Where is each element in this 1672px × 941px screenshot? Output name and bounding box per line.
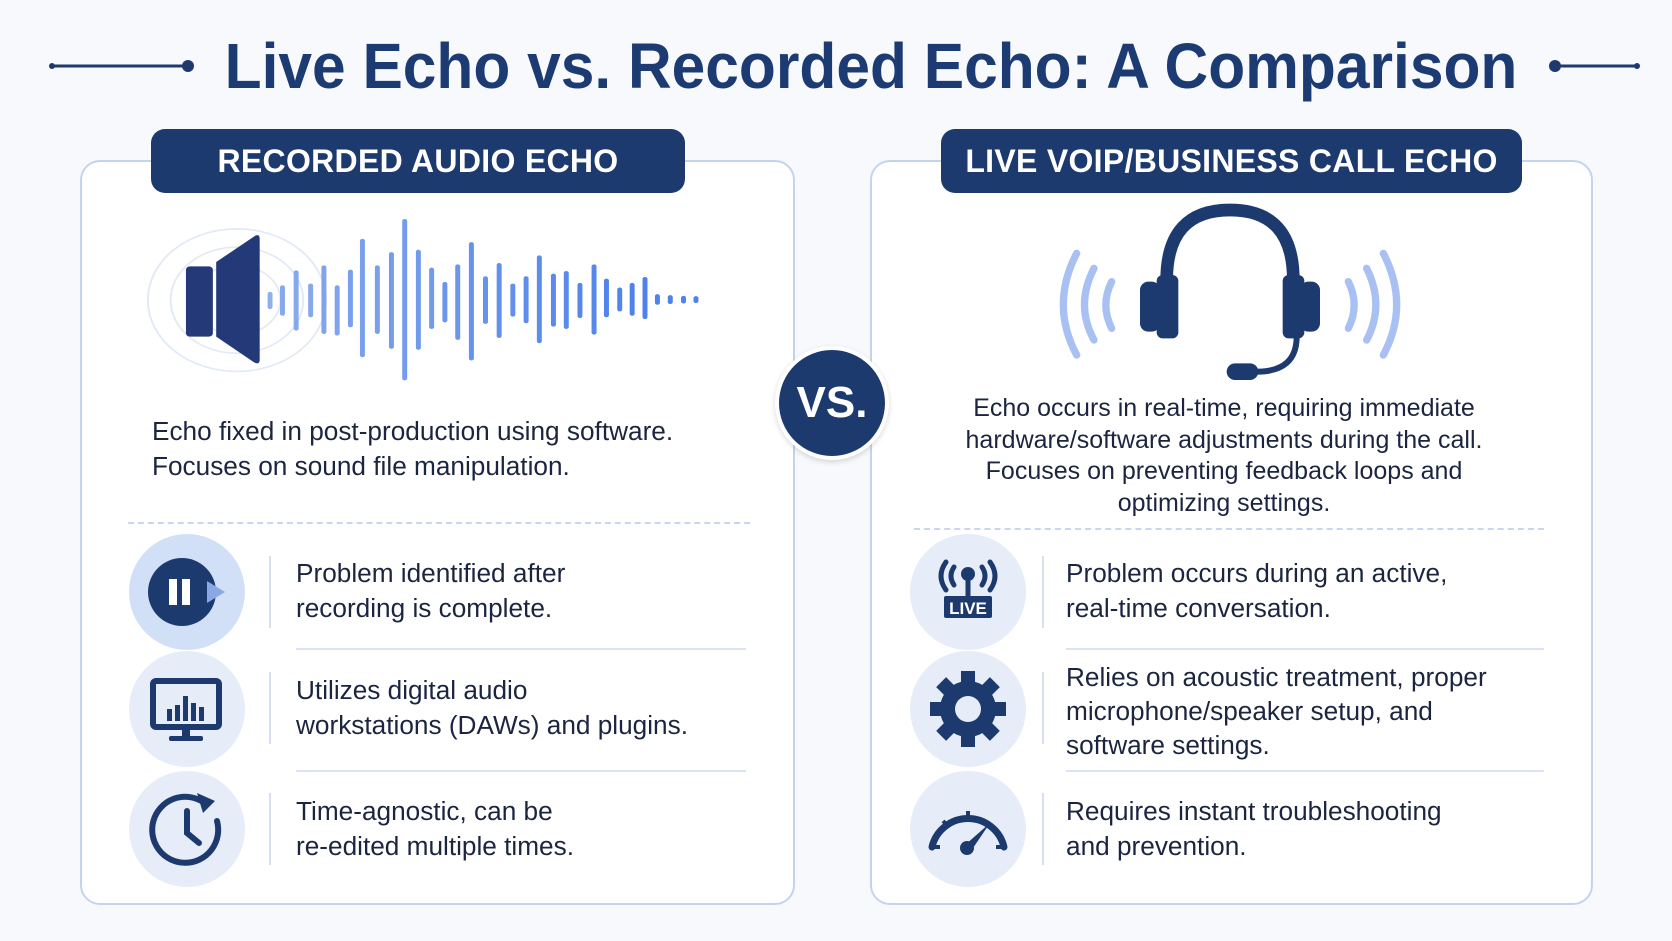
icon: vs circle: VS.	[797, 378, 867, 427]
icon: live antenna	[910, 534, 1026, 650]
title line left	[49, 60, 194, 72]
icon: monitor	[129, 651, 245, 767]
text: live description: hardware/software adjustments during the call.	[966, 426, 1482, 454]
text: row 1 left: Problem identified after	[296, 558, 565, 588]
title	[49, 30, 1640, 102]
icon: vs circle	[775, 346, 889, 460]
text: row 1 right: Problem occurs during an active,	[1066, 558, 1447, 588]
icon: pause/play	[129, 534, 245, 650]
title line right	[1549, 60, 1640, 72]
text: row 3 left: re-edited multiple times.	[296, 831, 574, 861]
text: row 2 left: Utilizes digital audio	[296, 675, 527, 705]
text: row 2 right: software settings.	[1066, 730, 1270, 760]
text: row 2 left: workstations (DAWs) and plugins.	[296, 710, 688, 740]
title text: Live Echo vs. Recorded Echo: A Comparison	[225, 30, 1517, 102]
text: row 3 left	[296, 796, 574, 861]
text: live description: Focuses on preventing feedback loops and	[986, 457, 1462, 485]
text: live description: optimizing settings.	[1118, 488, 1330, 516]
icon: headset	[1060, 204, 1400, 380]
text: recorded description: Echo fixed in post-production using software.	[152, 416, 673, 446]
text: row 1 right	[1066, 558, 1447, 623]
icon: live antenna: LIVE	[949, 599, 987, 618]
heading: recorded audio echo	[151, 129, 685, 193]
text: row 2 right: microphone/speaker setup, and	[1066, 696, 1433, 726]
text: row 3 right: and prevention.	[1066, 831, 1247, 861]
text: live description: Echo occurs in real-time, requiring immediate	[973, 394, 1475, 422]
text: row 2 right: Relies on acoustic treatment, proper	[1066, 662, 1487, 692]
heading: live voip: LIVE VOIP/BUSINESS CALL ECHO	[965, 142, 1498, 178]
text: recorded description	[152, 416, 673, 481]
text: recorded description: Focuses on sound file manipulation.	[152, 451, 570, 481]
text: live description	[966, 394, 1482, 516]
text: row 3 right: Requires instant troubleshooting	[1066, 796, 1442, 826]
text: row 2 left	[296, 675, 688, 740]
text: row 1 right: real-time conversation.	[1066, 593, 1331, 623]
text: row 1 left: recording is complete.	[296, 593, 552, 623]
text: row 1 left	[296, 558, 565, 623]
text: row 2 right	[1066, 662, 1487, 760]
icon: gear	[910, 651, 1026, 767]
heading: live voip	[941, 129, 1522, 193]
icon: clock	[129, 771, 245, 887]
heading: recorded audio echo: RECORDED AUDIO ECHO	[218, 142, 618, 178]
icon: speaker waveform	[146, 219, 698, 380]
icon: gauge	[910, 771, 1026, 887]
text: row 3 left: Time-agnostic, can be	[296, 796, 553, 826]
text: row 3 right	[1066, 796, 1442, 861]
